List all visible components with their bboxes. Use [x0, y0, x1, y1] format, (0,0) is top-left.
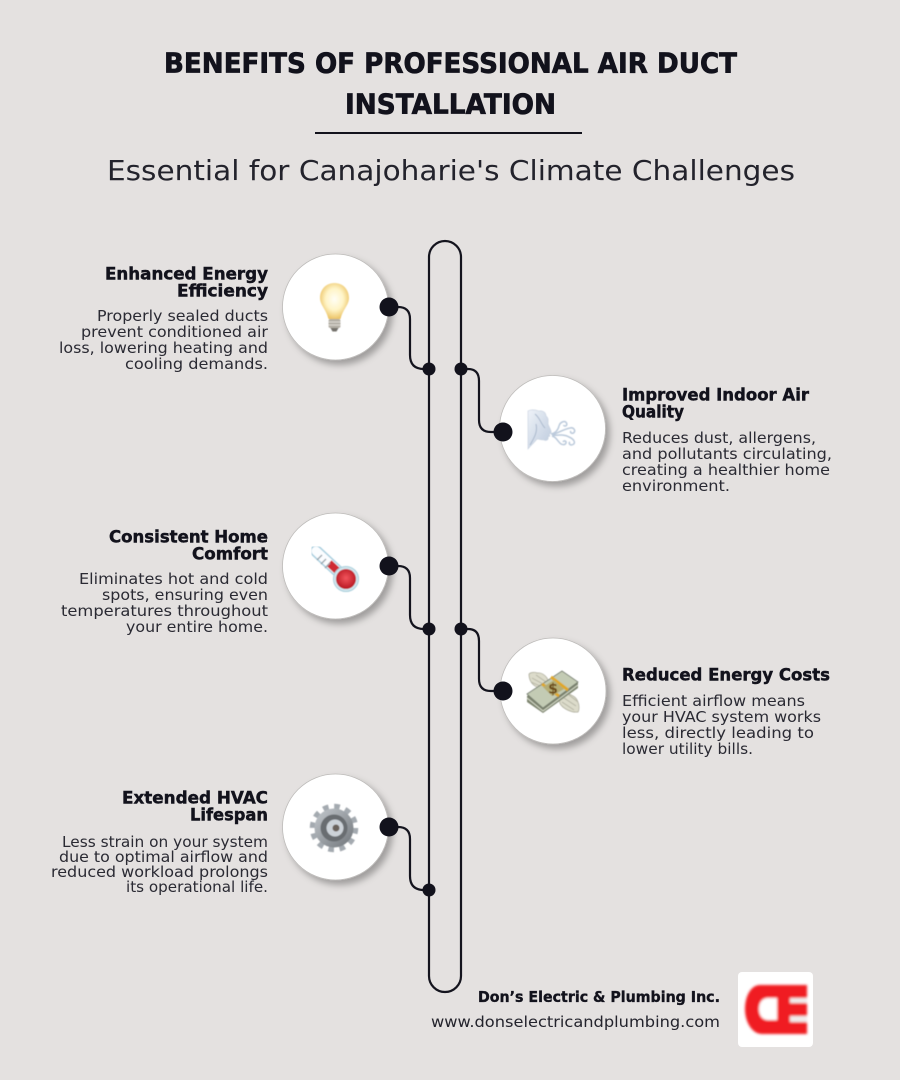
text: reduced energy costs: less, directly leading to: [622, 724, 814, 742]
heading: extended hvac lifespan: [122, 788, 268, 824]
circle: improved indoor air quality: [500, 376, 606, 482]
node on duct: [422, 622, 436, 636]
text: improved indoor air quality: [622, 429, 832, 495]
heading: enhanced energy efficiency: [105, 264, 268, 300]
panel: extended hvac lifespan: [51, 774, 436, 896]
text: improved indoor air quality: environment.: [622, 477, 730, 495]
connector: [461, 629, 503, 691]
circle: enhanced energy efficiency: [282, 254, 388, 360]
icon: money with wings: $: [548, 682, 558, 698]
heading: consistent home comfort: Comfort: [192, 544, 268, 564]
text: consistent home comfort: temperatures throughout: [61, 602, 268, 620]
node: [380, 818, 398, 836]
central duct line: [429, 241, 461, 992]
text: extended hvac lifespan: [51, 833, 268, 896]
heading: improved indoor air quality: [622, 386, 810, 422]
node: [380, 556, 398, 576]
text: reduced energy costs: Efficient airflow means: [622, 692, 805, 710]
node on duct: [422, 362, 436, 376]
heading: reduced energy costs: Reduced Energy Costs: [622, 666, 830, 684]
title: BENEFITS OF PROFESSIONAL AIR DUCT: [164, 48, 737, 80]
website: www.donselectricandplumbing.com: [431, 1013, 720, 1031]
text: reduced energy costs: your HVAC system works: [622, 708, 821, 726]
text: enhanced energy efficiency: cooling demands.: [125, 355, 268, 373]
text: improved indoor air quality: Reduces dust, allergens,: [622, 429, 816, 447]
connector: [389, 827, 429, 890]
text: consistent home comfort: spots, ensuring even: [102, 586, 268, 604]
logo: [738, 972, 813, 1047]
panel: reduced energy costs: [454, 622, 830, 758]
title: [164, 48, 737, 120]
heading: enhanced energy efficiency: Enhanced Energy: [105, 264, 268, 284]
text: extended hvac lifespan: Less strain on your system: [62, 833, 268, 851]
text: reduced energy costs: lower utility bills.: [622, 740, 753, 758]
heading: consistent home comfort: [109, 528, 268, 564]
company name: Don’s Electric & Plumbing Inc.: [478, 988, 720, 1006]
icon: gear: [312, 806, 356, 850]
title: INSTALLATION: [345, 88, 556, 120]
text: enhanced energy efficiency: Properly sealed ducts: [97, 307, 268, 325]
node on duct: [454, 362, 468, 376]
text: improved indoor air quality: creating a healthier home: [622, 461, 830, 479]
node on duct: [422, 884, 436, 896]
heading: extended hvac lifespan: Lifespan: [190, 806, 268, 824]
text: extended hvac lifespan: reduced workload prolongs: [51, 863, 268, 881]
connector: [461, 369, 503, 432]
circle: consistent home comfort: [282, 513, 388, 619]
node: [494, 682, 512, 700]
text: consistent home comfort: your entire home.: [126, 618, 268, 636]
icon: thermometer: [316, 551, 358, 592]
heading: enhanced energy efficiency: Efficiency: [177, 282, 268, 300]
subtitle: Essential for Canajoharie's Climate Challenges: [107, 154, 795, 187]
text: consistent home comfort: [61, 570, 268, 636]
text: improved indoor air quality: and pollutants circulating,: [622, 445, 832, 463]
text: consistent home comfort: Eliminates hot and cold: [79, 570, 268, 588]
panel: enhanced energy efficiency: [59, 254, 436, 376]
node on duct: [454, 622, 468, 636]
circle: reduced energy costs: [500, 638, 606, 744]
text: enhanced energy efficiency: loss, lowering heating and: [59, 339, 268, 357]
icon: money with wings: [527, 671, 579, 713]
text: reduced energy costs: [622, 692, 821, 758]
icon: light bulb: [320, 283, 349, 332]
node: [380, 298, 398, 316]
text: extended hvac lifespan: its operational life.: [126, 878, 268, 896]
panel: consistent home comfort: [61, 513, 436, 636]
text: enhanced energy efficiency: prevent conditioned air: [81, 323, 269, 341]
heading: improved indoor air quality: Quality: [622, 402, 684, 422]
panel: improved indoor air quality: [454, 362, 832, 495]
text: enhanced energy efficiency: [59, 307, 269, 373]
node: [494, 422, 512, 442]
heading: consistent home comfort: Consistent Home: [109, 528, 268, 546]
heading: improved indoor air quality: Improved Indoor Air: [622, 386, 810, 404]
icon: blowing face: [528, 410, 575, 449]
connector: [389, 307, 429, 369]
connector: [389, 566, 429, 629]
text: extended hvac lifespan: due to optimal airflow and: [59, 848, 268, 866]
circle: extended hvac lifespan: [282, 774, 388, 880]
heading: extended hvac lifespan: Extended HVAC: [122, 788, 268, 808]
